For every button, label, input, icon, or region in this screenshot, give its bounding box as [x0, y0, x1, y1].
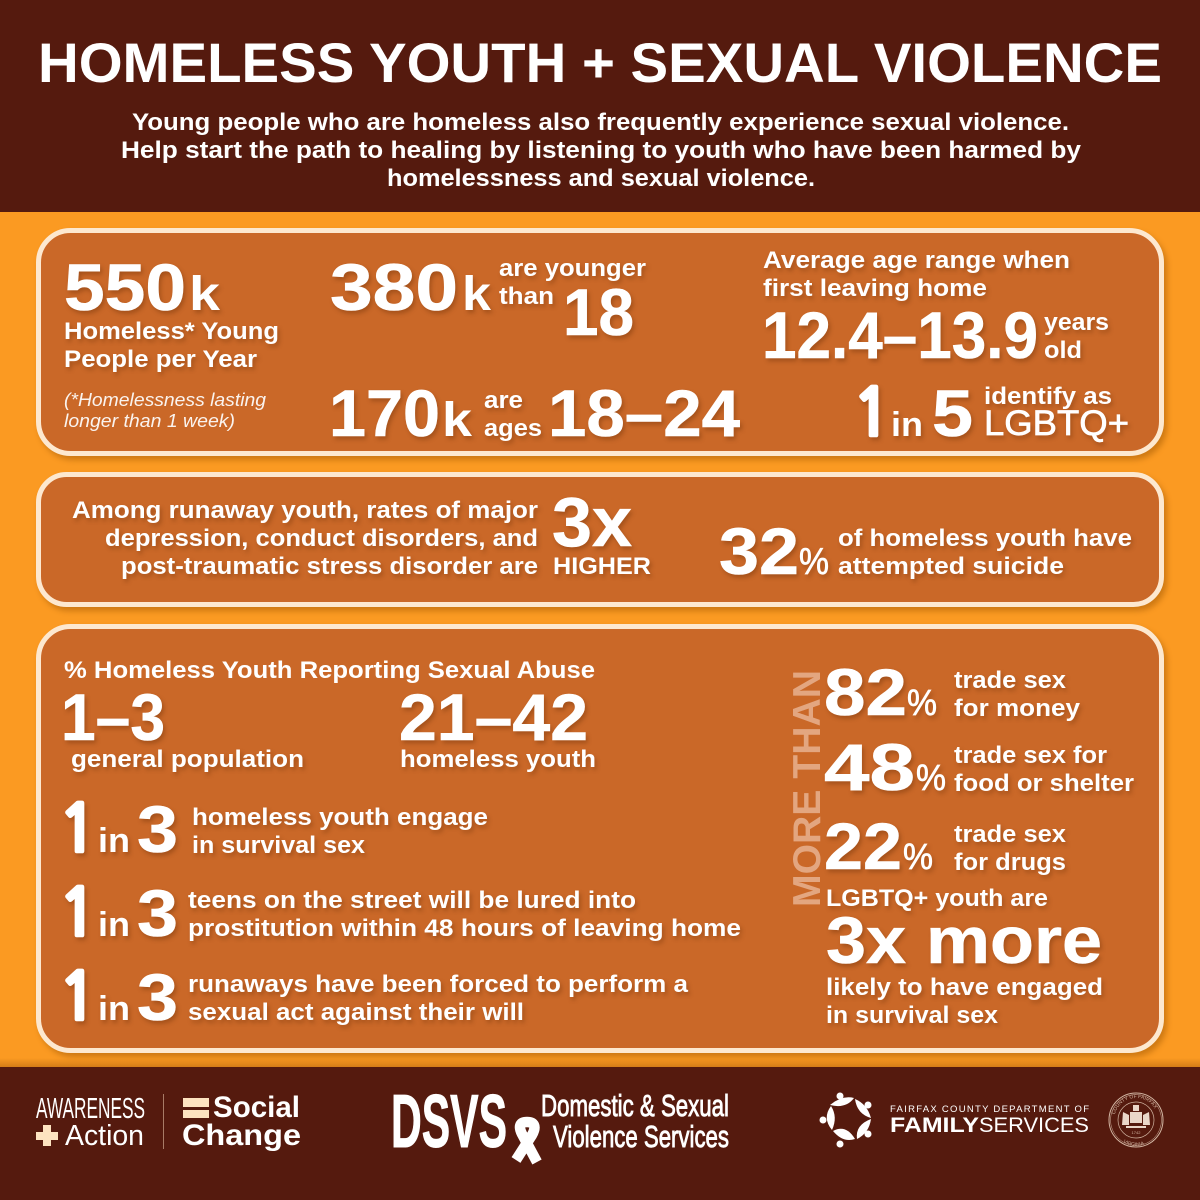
- logo: DSVS: DSVS: [391, 1079, 507, 1163]
- logo: Fairfax County Family Services: FAIRFAX COUNTY DEPARTMENT OF: [890, 1104, 1089, 1115]
- stat: LGBTQ+ 3x more likely: 3x more: [826, 903, 1102, 977]
- stat: 1 in 3 forced sexual act: 3: [137, 960, 178, 1034]
- stat: 380k younger than 18: 380: [330, 250, 458, 324]
- stat: 170k ages 18-24: ages: [484, 415, 542, 442]
- stat: 32% attempted suicide: %: [799, 541, 829, 582]
- logo: Awareness + Action: AWARENESS: [36, 1093, 145, 1125]
- logo: Fairfax County Family Services: FAMILY: [890, 1113, 979, 1137]
- stat: 1 in 3 lured into prostitution: teens on the street will be lured into: [188, 887, 636, 914]
- stat: 1 in 5 LGBTQ+: 1: [852, 380, 892, 446]
- heading: reporting sexual abuse: % Homeless Youth Reporting Sexual Abuse: [64, 657, 595, 684]
- stat: 1 in 3 lured into prostitution: 1: [58, 880, 98, 946]
- stat: 380k younger than 18: are younger: [499, 255, 646, 282]
- logo: county seal: COUNTY OF FAIRFAX: [1112, 1094, 1158, 1114]
- stat: LGBTQ+ 3x more likely: LGBTQ+ youth are: [826, 885, 1048, 912]
- stat: 1 in 3 forced sexual act: 1: [58, 964, 98, 1030]
- stat: 1 in 3 lured into prostitution: 3: [137, 876, 178, 950]
- intro text: Help start the path to healing by listening to youth who have been harmed by: [121, 137, 1082, 164]
- stat: 82% for money: for money: [954, 695, 1081, 722]
- stat: 1 in 3 lured into prostitution: [58, 876, 741, 950]
- stat: 1 in 5 LGBTQ+: [852, 376, 1129, 450]
- stat: general population 1-3: general population: [71, 746, 304, 773]
- stat: average age leaving home: 12.4–13.9: [762, 298, 1038, 372]
- stat: 48% for food or shelter: food or shelter: [954, 770, 1134, 797]
- stat: 550k homeless young people: [64, 250, 279, 373]
- logo: Fairfax County Family Services: SERVICES: [979, 1113, 1089, 1137]
- stat: 3x higher: [552, 483, 651, 580]
- header band: [0, 0, 1200, 212]
- stat: 550k homeless young people: People per Year: [64, 346, 257, 373]
- stat: 1 in 3 lured into prostitution: prostitution within 48 hours of leaving home: [188, 915, 741, 942]
- logo: Awareness + Action: Action: [65, 1120, 144, 1152]
- stat: 550k homeless young people: Homeless* Young: [64, 318, 279, 345]
- panel: homeless population statistics: [38, 230, 1162, 454]
- stat: average age leaving home: old: [1044, 337, 1082, 364]
- logo: Social Change: Change: [182, 1119, 301, 1152]
- stat: 3x higher: 3x: [552, 483, 632, 561]
- text: runaway youth disorders: [72, 497, 538, 580]
- stat: 1 in 3 lured into prostitution: in: [98, 906, 130, 944]
- intro text: [121, 109, 1082, 192]
- logo: Awareness + Action: [36, 1093, 145, 1152]
- stat: average age leaving home: first leaving home: [763, 275, 987, 302]
- stat: 550k homeless young people: k: [189, 268, 220, 321]
- stat: 170k ages 18-24: [329, 376, 740, 450]
- stat: 48% for food or shelter: 48: [824, 730, 915, 804]
- footnote: homelessness definition: [64, 390, 266, 431]
- stat: 82% for money: %: [907, 682, 937, 723]
- stat: 550k homeless young people: 550: [64, 250, 186, 324]
- stat: 32% attempted suicide: 32: [719, 514, 799, 588]
- stat: 380k younger than 18: k: [462, 268, 491, 321]
- stat: 48% for food or shelter: [824, 730, 1134, 804]
- stat: 380k younger than 18: 18: [563, 275, 634, 349]
- footer band: [0, 1060, 1200, 1200]
- logo: Social Change: Social: [213, 1091, 300, 1124]
- intro text: homelessness and sexual violence.: [387, 165, 815, 192]
- stat: 1 in 3 survival sex: 3: [137, 792, 178, 866]
- stat: 170k ages 18-24: are: [484, 387, 523, 414]
- stat: 82% for money: 82: [824, 655, 907, 729]
- stat: 380k younger than 18: [330, 250, 646, 349]
- footnote: homelessness definition: (*Homelessness lasting: [64, 390, 266, 410]
- stat: LGBTQ+ 3x more likely: likely to have engaged: [826, 974, 1103, 1001]
- stat: 3x higher: HIGHER: [553, 553, 651, 580]
- logo: DSVS: Violence Services: [553, 1119, 729, 1154]
- logo: Fairfax County Family Services: [820, 1092, 1089, 1148]
- stat: 1 in 3 survival sex: in survival sex: [192, 832, 366, 859]
- stat: 82% for money: trade sex: [954, 667, 1067, 694]
- icon: circle of people: [820, 1092, 872, 1148]
- stat: LGBTQ+ 3x more likely: [826, 885, 1103, 1029]
- vertical label: more than: MORE THAN: [786, 670, 829, 907]
- stat: 1 in 3 forced sexual act: [58, 960, 689, 1034]
- stat: general population 1-3: [61, 680, 304, 773]
- stat: 48% for food or shelter: %: [916, 757, 946, 798]
- stat: average age leaving home: Average age range when: [763, 247, 1070, 274]
- stat: homeless youth 21-42: homeless youth: [400, 746, 596, 773]
- stat: average age leaving home: years: [1044, 309, 1109, 336]
- footnote: homelessness definition: longer than 1 week): [64, 411, 235, 431]
- stat: 170k ages 18-24: 18–24: [548, 376, 740, 450]
- text: runaway youth disorders: Among runaway youth, rates of major: [72, 497, 538, 524]
- stat: 1 in 3 forced sexual act: runaways have been forced to perform a: [188, 971, 689, 998]
- stat: 32% attempted suicide: attempted suicide: [838, 553, 1064, 580]
- stat: 1 in 3 survival sex: in: [98, 822, 130, 860]
- stat: LGBTQ+ 3x more likely: in survival sex: [826, 1002, 999, 1029]
- stat: 22% for drugs: for drugs: [954, 849, 1066, 876]
- intro text: Young people who are homeless also frequently experience sexual violence.: [132, 109, 1069, 136]
- stat: 1 in 3 forced sexual act: sexual act against their will: [188, 999, 524, 1026]
- stat: general population 1-3: 1–3: [61, 680, 165, 754]
- panel: mental health statistics: [38, 474, 1162, 604]
- stat: 48% for food or shelter: trade sex for: [954, 742, 1107, 769]
- stat: 22% for drugs: %: [903, 836, 933, 877]
- logo: DSVS: Domestic & Sexual: [541, 1088, 729, 1123]
- stat: 1 in 3 survival sex: homeless youth engage: [192, 804, 488, 831]
- stat: 1 in 3 forced sexual act: in: [98, 990, 130, 1028]
- stat: 1 in 5 LGBTQ+: identify as: [984, 383, 1112, 410]
- stat: average age leaving home: [762, 247, 1109, 372]
- logo: county seal: 1742: [1132, 1130, 1141, 1135]
- logo: county seal: [1108, 1092, 1164, 1148]
- stat: 32% attempted suicide: [719, 514, 1132, 588]
- stat: 32% attempted suicide: of homeless youth have: [838, 525, 1132, 552]
- stat: 1 in 5 LGBTQ+: LGBTQ+: [984, 404, 1129, 443]
- stat: 1 in 3 survival sex: [58, 792, 488, 866]
- stat: homeless youth 21-42: 21–42: [399, 680, 588, 754]
- text: runaway youth disorders: post-traumatic stress disorder are: [121, 553, 538, 580]
- stat: 1 in 5 LGBTQ+: in: [891, 406, 923, 444]
- stat: 82% for money: [824, 655, 1081, 729]
- stat: 380k younger than 18: than: [499, 283, 554, 310]
- panel: sexual abuse statistics: [38, 626, 1162, 1050]
- stat: 22% for drugs: 22: [824, 809, 902, 883]
- icon: awareness ribbon: [516, 1122, 537, 1162]
- text: runaway youth disorders: depression, conduct disorders, and: [105, 525, 538, 552]
- stat: 22% for drugs: [824, 809, 1067, 883]
- stat: 1 in 5 LGBTQ+: 5: [932, 376, 973, 450]
- title: HOMELESS YOUTH + SEXUAL VIOLENCE: [38, 31, 1162, 94]
- logo: Social Change: [182, 1091, 301, 1152]
- stat: 22% for drugs: trade sex: [954, 821, 1067, 848]
- stat: 1 in 3 survival sex: 1: [58, 796, 98, 862]
- stat: 170k ages 18-24: 170: [329, 376, 440, 450]
- stat: 170k ages 18-24: k: [442, 394, 472, 447]
- logo: DSVS: [391, 1079, 729, 1163]
- logo: county seal: VIRGINIA: [1124, 1139, 1144, 1146]
